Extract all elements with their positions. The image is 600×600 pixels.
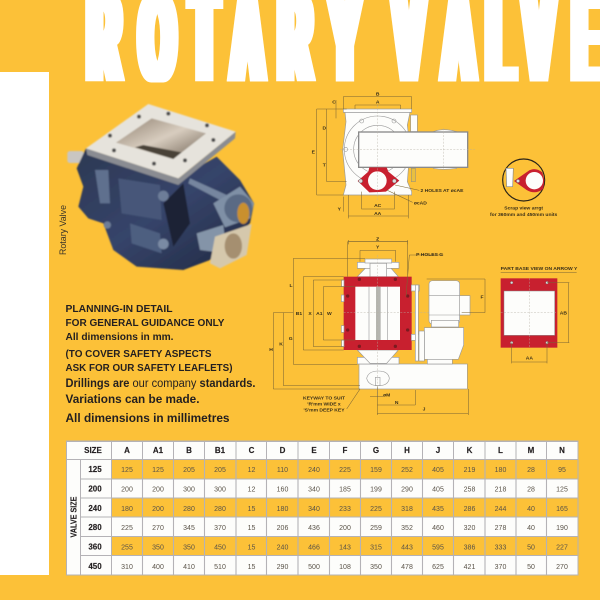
dimensions table: 400 (152, 564, 164, 571)
bearing (213, 187, 254, 227)
dimensions table: 28 (527, 467, 535, 474)
dimensions table: 200 (152, 486, 164, 494)
dimensions table: 15 (248, 525, 255, 532)
part base view: PART BASE VIEW ON ARROW Y (501, 266, 578, 272)
dimensions table: 225 (121, 525, 133, 532)
dimensions table: 300 (183, 486, 195, 494)
dimensions table: 450 (88, 562, 102, 571)
dimensions table: 252 (401, 467, 413, 474)
dimensions table: 436 (308, 525, 320, 532)
lower drawing: front view with motor: øM (383, 392, 390, 398)
dimensions table: 405 (432, 467, 444, 474)
dimensions table: 370 (214, 525, 226, 532)
lower drawing: front view with motor: J (423, 406, 426, 412)
dimensions table: 50 (527, 564, 535, 571)
gearbox (424, 328, 464, 359)
dimensions table: 320 (464, 525, 475, 532)
dimensions table: J (436, 446, 440, 455)
lower drawing: front view with motor: W (327, 311, 332, 317)
dimensions table: 180 (277, 506, 288, 513)
dimensions table: 410 (183, 564, 195, 571)
dimensions table: 200 (88, 484, 102, 494)
dimensions table: VALVE SIZE (70, 496, 78, 538)
plate holes (108, 112, 215, 166)
dimensions table: 478 (401, 564, 413, 571)
dimensions table: 466 (308, 544, 320, 552)
dimensions table: C (249, 446, 255, 455)
planning text block: Drillings are our company standards. (66, 378, 256, 390)
dimensions table: 350 (183, 544, 195, 552)
dimensions table: 290 (401, 486, 413, 494)
dimensions table: M (528, 446, 535, 455)
scrap view detail: Scrap view arrgt (504, 205, 543, 211)
top drawing: end view with dimensions: T (323, 163, 326, 169)
dimensions table: 40 (527, 525, 535, 532)
dimensions table: 95 (558, 467, 566, 474)
top drawing: end view with dimensions: A (376, 100, 380, 106)
dimensions table: 200 (121, 486, 133, 494)
outlet flange (210, 224, 252, 268)
table value rows (112, 460, 578, 478)
dimensions table: A1 (153, 446, 164, 455)
dimensions table: 180 (121, 506, 133, 513)
keyway note: KEYWAY TO SUIT (303, 395, 345, 401)
body highlights (118, 178, 162, 220)
dimensions table: 360 (88, 542, 102, 552)
dimensions table: 125 (88, 465, 102, 474)
dimensions table: 625 (432, 564, 444, 571)
dimensions table: 259 (370, 525, 382, 532)
dimensions table: 435 (432, 506, 444, 513)
keyway note: 'R'mm WIDE x (307, 401, 341, 407)
plate opening (116, 118, 206, 159)
dimensions table: 205 (183, 467, 195, 474)
lower drawing: front view with motor (269, 236, 485, 415)
motor (429, 281, 460, 324)
shaft (67, 151, 84, 163)
valve body (77, 148, 254, 270)
lower drawing: front view with motor: P HOLES G (416, 252, 443, 258)
dimensions table: H (404, 446, 410, 455)
dimensions table: 370 (495, 564, 506, 571)
dimensions table: 510 (214, 564, 226, 571)
top drawing: end view with dimensions: E (312, 150, 316, 156)
dimensions table: 240 (277, 544, 288, 552)
dimensions table: 110 (277, 467, 288, 474)
dimensions table: 300 (214, 486, 226, 494)
dimensions table: 180 (495, 467, 506, 474)
dimensions table: 258 (464, 486, 475, 494)
base plate (359, 364, 467, 389)
dimensions table: A (124, 446, 130, 455)
lower drawing: front view with motor: L (289, 283, 293, 289)
dimensions table: D (280, 446, 286, 455)
scrap view detail: for 360mm and 450mm units (490, 212, 558, 218)
dimensions table: 12 (248, 467, 255, 474)
dimensions table: 205 (214, 467, 226, 474)
part base view: AB (560, 311, 567, 317)
top drawing: end view with dimensions: øcAD (414, 200, 427, 206)
dimensions table: 290 (277, 564, 288, 571)
dimensions table: 159 (370, 467, 382, 474)
dimensions table: 225 (339, 467, 351, 474)
dimensions table: G (373, 446, 379, 455)
lower drawing: front view with motor: K (279, 342, 283, 348)
coupling bar (411, 285, 419, 291)
dimensions table: 15 (248, 506, 255, 513)
dimensions table: 40 (527, 506, 535, 513)
dimensions table: F (343, 446, 348, 455)
dimensions table: 340 (308, 506, 320, 513)
dimensions table: N (559, 446, 565, 455)
dimensions table: 280 (88, 523, 102, 532)
dimensions table: 405 (432, 486, 444, 494)
inlet and outlet (357, 263, 398, 277)
dimensions table: 270 (152, 525, 164, 532)
dimensions table: 345 (183, 525, 195, 532)
keyway note: 'S'mm DEEP KEY (303, 408, 345, 414)
dimensions table: 125 (556, 486, 568, 494)
dimensions table: 206 (277, 525, 288, 532)
dimensions table: 125 (152, 467, 164, 474)
dimensions table: 225 (370, 506, 382, 513)
motor shaft housing (433, 130, 457, 169)
dimensions table: 200 (152, 506, 164, 513)
top drawing: end view with dimensions: D (323, 126, 327, 132)
dimensions table: 280 (214, 506, 226, 513)
top drawing: end view with dimensions: Z (376, 237, 379, 243)
dimensions table: 28 (527, 486, 535, 494)
top drawing: end view with dimensions: Y (338, 207, 342, 213)
dimensions table: 190 (556, 525, 568, 532)
dimensions table: 244 (495, 506, 506, 513)
red flange (358, 167, 399, 192)
dimensions table: 227 (556, 544, 568, 552)
dimensions table: K (467, 446, 473, 455)
top drawing: end view with dimensions (312, 91, 475, 244)
photo: rotary valve (67, 104, 254, 270)
dimensions table: 500 (308, 564, 320, 571)
dimensions table: 315 (370, 544, 382, 552)
dimensions table: 165 (556, 506, 568, 513)
top drawing: end view with dimensions: C (332, 99, 336, 105)
dimension lines (317, 97, 419, 244)
lower drawing: front view with motor: H (269, 347, 273, 353)
planning text block: PLANNING-IN DETAIL (66, 304, 172, 315)
lower drawing: front view with motor: A1 (316, 311, 323, 317)
dimensions table: 255 (121, 544, 133, 552)
dimensions table: 350 (152, 544, 164, 552)
dimensions table: L (498, 446, 503, 455)
keyway note (303, 395, 345, 414)
top drawing: end view with dimensions: 2 HOLES AT øcAE (421, 188, 464, 194)
dimensions table: SIZE (84, 446, 103, 455)
dimensions table: 443 (401, 544, 413, 552)
scrap view detail (490, 159, 558, 218)
dimensions table: 143 (339, 544, 351, 552)
top plate (86, 132, 236, 185)
caption: Rotary Valve: Rotary Valve (58, 205, 69, 255)
keyway shaft (367, 371, 389, 386)
lower drawing: front view with motor: Y (376, 244, 380, 250)
planning text block: All dimensions in millimetres (66, 413, 230, 425)
dimensions table: 233 (339, 506, 351, 513)
planning text block: (TO COVER SAFETY ASPECTS (66, 349, 212, 360)
top drawing: end view with dimensions: AC (374, 203, 382, 209)
planning text block: ASK FOR OUR SAFETY LEAFLETS) (66, 363, 232, 374)
valve body (343, 112, 412, 195)
dimensions table: 318 (401, 506, 413, 513)
dimensions table: 199 (370, 486, 382, 494)
dimensions table: 450 (214, 544, 226, 552)
dimensions table: 12 (248, 486, 255, 494)
dimensions table: 240 (308, 467, 320, 474)
dimension labels: Z (376, 236, 379, 242)
dimensions table: 278 (495, 525, 506, 532)
dimensions table: 160 (277, 486, 288, 494)
dimensions table: 280 (183, 506, 195, 513)
planning text block (66, 304, 256, 425)
dimensions table: B1 (215, 446, 226, 455)
planning text block: Variations can be made. (66, 394, 200, 406)
dimensions table: 333 (495, 544, 506, 552)
white side band (0, 72, 49, 575)
end bearing plates (411, 115, 417, 132)
dimensions table: 240 (88, 504, 102, 513)
dimensions table: 595 (432, 544, 444, 552)
dimension labels: B (376, 91, 380, 97)
part base view (501, 266, 578, 363)
dimensions table: 270 (556, 564, 568, 571)
lower drawing: front view with motor: F (480, 295, 484, 301)
planning text block: FOR GENERAL GUIDANCE ONLY (66, 318, 225, 329)
dimensions table: 218 (495, 486, 506, 494)
lower drawing: front view with motor: N (395, 400, 399, 406)
dimensions table: 108 (339, 564, 351, 571)
dimension lines (273, 242, 485, 415)
dimensions table: 386 (464, 544, 475, 552)
dimensions table: 352 (401, 525, 413, 532)
dimensions table: 421 (464, 564, 475, 571)
dimensions table: 185 (339, 486, 351, 494)
dimensions table: 15 (248, 544, 255, 552)
lower drawing: front view with motor: G (289, 336, 293, 342)
dimensions table: 219 (464, 467, 475, 474)
dimensions table: 125 (121, 467, 133, 474)
motor body (359, 132, 468, 167)
dimensions table: 286 (464, 506, 475, 513)
dimensions table: 200 (339, 525, 351, 532)
part base view: AA (526, 355, 533, 361)
dimensions table: 15 (248, 564, 255, 571)
planning text block: All dimensions in mm. (66, 332, 174, 343)
top drawing: end view with dimensions: AA (374, 211, 382, 217)
dimensions table: E (311, 446, 317, 455)
dimensions table: 340 (308, 486, 320, 494)
lower drawing: front view with motor: X (308, 311, 312, 317)
dimensions table (66, 440, 578, 576)
dimensions table: 310 (121, 564, 133, 571)
dimensions table: 460 (432, 525, 444, 532)
lower drawing: front view with motor: B1 (296, 311, 302, 317)
dimensions table: 350 (370, 564, 382, 571)
red housing (344, 277, 412, 350)
dimensions table: B (186, 446, 192, 455)
housing opening (355, 287, 400, 340)
dimensions table: 50 (527, 544, 535, 552)
